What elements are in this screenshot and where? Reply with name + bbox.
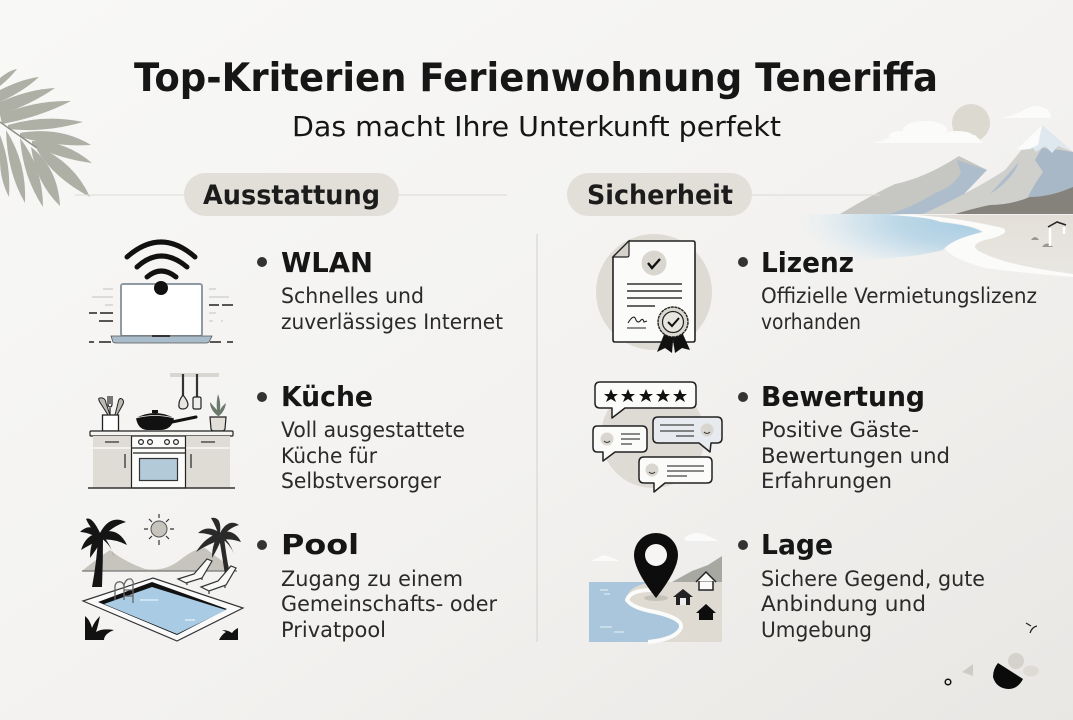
panel: Ausstattung — [75, 173, 507, 642]
text: Küche: Voll ausgestattete — [281, 418, 465, 442]
text: Bewertung: Bewertung — [761, 380, 925, 413]
text: Küche: Selbstversorger — [281, 469, 441, 493]
text: WLAN: zuverlässiges Internet — [281, 310, 503, 334]
heading: Sicherheit — [567, 173, 752, 216]
text: Lizenz: Offizielle Vermietungslizenz — [761, 284, 1037, 308]
text: WLAN: WLAN — [281, 246, 373, 279]
text: Lage: Anbindung und — [761, 592, 926, 616]
text: Lizenz — [738, 246, 1037, 334]
text: WLAN — [257, 246, 503, 334]
text: Lage: Lage — [761, 528, 833, 561]
icon: kitchen — [88, 373, 235, 488]
text: Küche: Küche für — [281, 444, 377, 468]
text: Pool: Privatpool — [281, 618, 386, 642]
text: Küche — [257, 380, 465, 493]
text: Lage: Umgebung — [761, 618, 872, 642]
text: Lage — [738, 528, 985, 642]
icon: wifi laptop — [89, 242, 233, 343]
heading: Sicherheit: Sicherheit — [587, 180, 733, 211]
text: Bewertung: Bewertungen und — [761, 444, 950, 468]
icon: location map — [589, 533, 722, 642]
text: Lage: Sichere Gegend, gute — [761, 567, 985, 591]
panel: Sicherheit — [567, 173, 1037, 642]
text: Küche: Küche — [281, 380, 373, 413]
text: Pool — [257, 528, 497, 642]
icon: pool with palms — [80, 514, 243, 641]
decoration: palm leaf top left — [0, 69, 92, 207]
heading: Ausstattung: Ausstattung — [203, 180, 380, 211]
heading: Ausstattung — [184, 173, 399, 216]
icon: review bubbles — [593, 382, 722, 492]
subtitle: Das macht Ihre Unterkunft perfekt — [292, 110, 781, 143]
text: Pool: Gemeinschafts- oder — [281, 592, 497, 616]
text: Bewertung: Positive Gäste- — [761, 418, 919, 442]
text: Bewertung: Erfahrungen — [761, 469, 892, 493]
decoration: geometric shapes bottom right — [945, 623, 1039, 689]
icon: licence document — [596, 234, 712, 353]
text: Pool: Pool — [281, 528, 359, 561]
title: Top-Kriterien Ferienwohnung Teneriffa — [134, 56, 938, 101]
text: Lizenz: Lizenz — [761, 246, 854, 279]
text: Bewertung — [738, 380, 950, 493]
text: Lizenz: vorhanden — [761, 310, 861, 334]
landscape: mountains and beach top right — [775, 104, 1073, 277]
text: WLAN: Schnelles und — [281, 284, 424, 308]
text: Pool: Zugang zu einem — [281, 567, 463, 591]
